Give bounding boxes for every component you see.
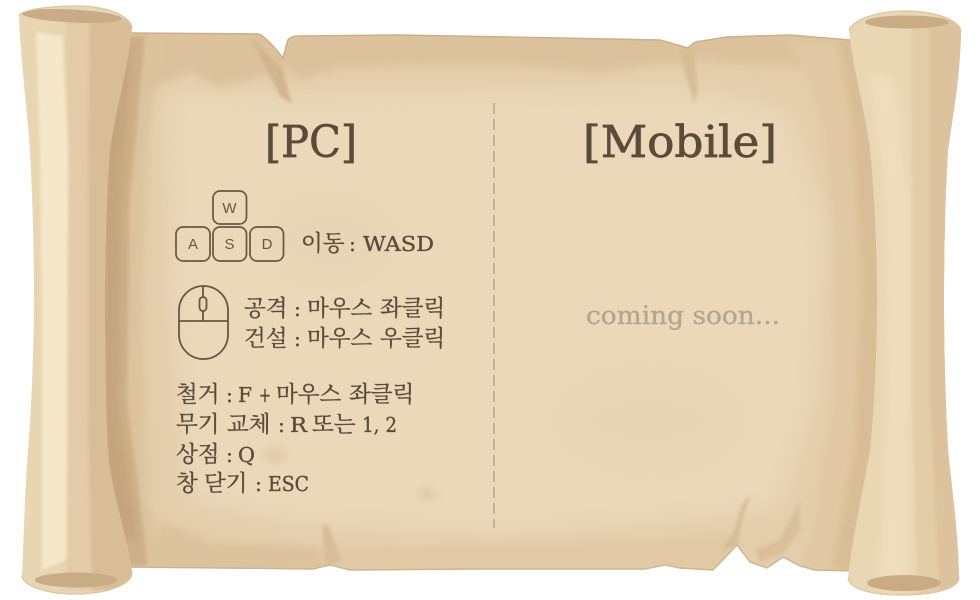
- text: shop: [176, 437, 255, 469]
- icon: WASD keys: [176, 191, 284, 261]
- text: shop: 상점: [176, 437, 219, 469]
- text: close window: :: [255, 472, 262, 496]
- text: coming soon: coming soon...: [586, 301, 780, 330]
- text: close window: ESC: [268, 472, 309, 496]
- text: swap weapon: 교체: [227, 407, 270, 439]
- text: demolish: F: [238, 383, 252, 407]
- icon: mouse: [179, 286, 228, 359]
- text: demolish: 좌클릭: [349, 377, 414, 409]
- text: swap weapon: 1, 2: [362, 413, 397, 437]
- icon: WASD keys: W: [222, 200, 237, 217]
- text: build: 우클릭: [380, 321, 445, 353]
- panel: left scroll roller: [18, 5, 133, 595]
- text: swap weapon: 또는: [312, 407, 356, 439]
- text: shop: Q: [238, 443, 255, 467]
- text: demolish: +: [259, 383, 271, 407]
- text: shop: :: [226, 443, 233, 467]
- heading: PC: [PC]: [265, 117, 357, 168]
- text: build: [244, 321, 445, 353]
- text: close window: [176, 466, 309, 498]
- text: swap weapon: :: [278, 413, 285, 437]
- text: move: 이동: [301, 226, 345, 258]
- text: demolish: [176, 377, 414, 409]
- divider: dashed centre line: [493, 103, 495, 528]
- text: build: :: [294, 327, 301, 351]
- text: close window: 닫기: [204, 466, 247, 498]
- icon: WASD keys: S: [224, 236, 235, 253]
- text: attack: 마우스: [307, 291, 372, 323]
- text: attack: [244, 291, 445, 323]
- text: close window: 창: [176, 466, 198, 498]
- text: swap weapon: [176, 407, 397, 439]
- icon: WASD keys: D: [262, 236, 273, 253]
- text: move: [301, 226, 434, 258]
- text: attack: :: [294, 297, 301, 321]
- text: swap weapon: R: [290, 413, 308, 437]
- text: demolish: :: [226, 383, 233, 407]
- text: demolish: 철거: [176, 377, 219, 409]
- heading: Mobile: [Mobile]: [583, 117, 777, 168]
- text: build: 건설: [244, 321, 287, 353]
- panel: parchment sheet: [90, 30, 890, 572]
- text: move: WASD: [363, 232, 434, 256]
- text: attack: 공격: [244, 291, 287, 323]
- icon: WASD keys: A: [188, 236, 198, 253]
- text: build: 마우스: [307, 321, 372, 353]
- panel: right scroll roller: [848, 10, 962, 596]
- text: demolish: 마우스: [276, 377, 341, 409]
- text: attack: 좌클릭: [380, 291, 445, 323]
- text: swap weapon: 무기: [176, 407, 219, 439]
- text: move: :: [349, 232, 356, 256]
